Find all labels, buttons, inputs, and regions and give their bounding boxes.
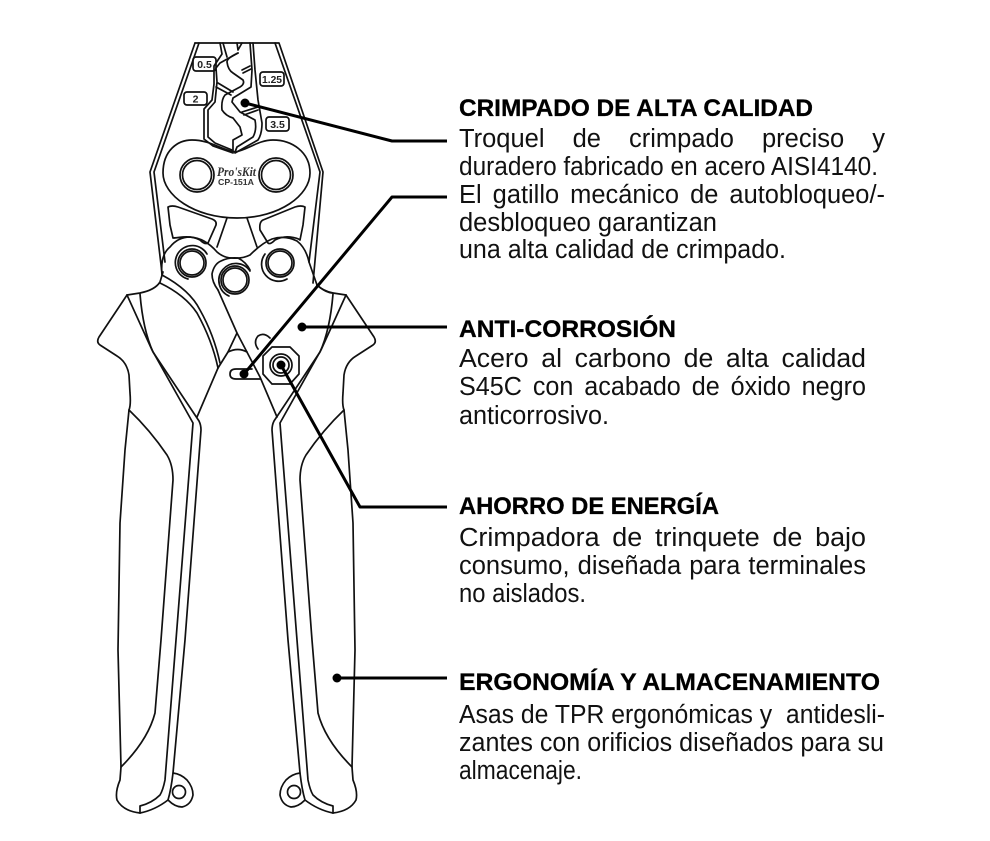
right handle bbox=[272, 285, 375, 813]
lower pockets and pivot plate bbox=[160, 206, 333, 417]
logo text: Pro'sKit bbox=[217, 164, 256, 179]
label 0.5: 0.5 bbox=[197, 59, 212, 71]
body: S45C con acabado de óxido negro bbox=[459, 373, 866, 401]
body: consumo, diseñada para terminales bbox=[459, 552, 866, 580]
body: desbloqueo garantizan bbox=[459, 209, 717, 237]
label 3.5: 3.5 bbox=[270, 119, 285, 131]
body: anticorrosivo. bbox=[459, 402, 609, 430]
jaw head outline bbox=[150, 43, 323, 283]
text block: crimping quality bbox=[459, 95, 885, 264]
body: zantes con orificios diseñados para su bbox=[459, 729, 884, 757]
hex nut bbox=[263, 347, 299, 384]
pivot rivets bbox=[175, 246, 294, 296]
body: Acero al carbono de alta calidad bbox=[459, 345, 866, 373]
heading: ANTI-CORROSIÓN bbox=[459, 315, 676, 343]
body: duradero fabricado en acero AISI4140. bbox=[459, 153, 878, 181]
body bbox=[459, 345, 866, 430]
illustration: crimping pliers bbox=[98, 43, 375, 813]
crimping dies bbox=[204, 43, 262, 153]
central plate with logo bbox=[163, 140, 310, 218]
leader: ergonomics bbox=[332, 674, 447, 682]
label 2: 2 bbox=[193, 94, 199, 106]
heading: CRIMPADO DE ALTA CALIDAD bbox=[459, 95, 813, 122]
leader: crimping bbox=[240, 98, 447, 141]
left handle bbox=[98, 272, 201, 813]
body bbox=[459, 125, 885, 264]
text block: ergonomics bbox=[459, 668, 885, 785]
heading: AHORRO DE ENERGÍA bbox=[459, 492, 719, 520]
trigger pin bbox=[256, 334, 270, 349]
body: una alta calidad de crimpado. bbox=[459, 236, 786, 264]
model text: CP-151A bbox=[218, 177, 254, 187]
body: Asas de TPR ergonómicas y antidesli- bbox=[459, 701, 885, 729]
body: almacenaje. bbox=[459, 757, 582, 785]
leader: energy saving bbox=[276, 360, 447, 507]
body: no aislados. bbox=[459, 580, 586, 608]
trigger slot bbox=[230, 369, 260, 379]
body: Troquel de crimpado preciso y bbox=[459, 125, 885, 153]
leader: trigger bbox=[240, 197, 447, 378]
heading: ERGONOMÍA Y ALMACENAMIENTO bbox=[459, 668, 880, 696]
text block: energy saving bbox=[459, 492, 866, 608]
text block: anti-corrosion bbox=[459, 315, 866, 430]
leader: anti-corrosion bbox=[298, 322, 447, 332]
body: El gatillo mecánico de autobloqueo/- bbox=[459, 181, 885, 209]
body bbox=[459, 701, 885, 785]
size labels bbox=[184, 57, 289, 131]
body bbox=[459, 524, 866, 608]
label 1.25: 1.25 bbox=[262, 74, 282, 86]
body: Crimpadora de trinquete de bajo bbox=[459, 524, 866, 552]
